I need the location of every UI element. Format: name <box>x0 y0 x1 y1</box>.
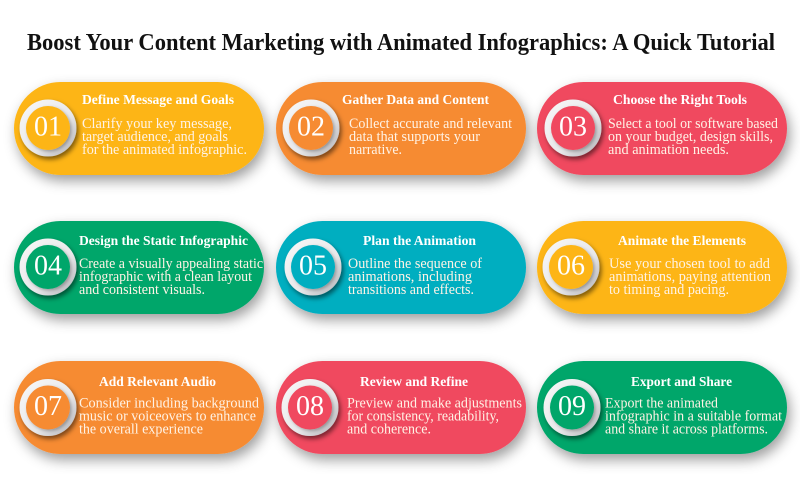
text 08: for consistency, readability, <box>347 408 499 424</box>
heading 01: Define Message and Goals <box>82 92 234 107</box>
text 01 <box>82 116 247 158</box>
text 02: data that supports your <box>349 129 480 145</box>
panel: step 08 <box>276 361 526 454</box>
badge 07 <box>20 379 76 436</box>
badge 05: 05 <box>299 250 327 282</box>
panel: step 04 <box>14 221 264 314</box>
panel: step 03 <box>537 82 787 175</box>
text 03: and animation needs. <box>608 142 729 158</box>
text 07: Consider including background <box>79 396 260 412</box>
text 08: Preview and make adjustments <box>347 396 522 412</box>
text 08: and coherence. <box>347 422 431 438</box>
panel: step 06 <box>537 221 787 314</box>
badge 04 <box>20 238 76 296</box>
badge 05 <box>284 238 342 296</box>
text 08 <box>347 396 522 438</box>
text 02 <box>349 116 512 158</box>
text 03: on your budget, design skills, <box>608 129 773 145</box>
heading 02: Gather Data and Content <box>342 92 489 107</box>
badge 06: 06 <box>557 250 585 282</box>
text 04 <box>79 256 263 298</box>
badge 07: 07 <box>34 391 62 422</box>
panel: step 07 <box>14 361 264 454</box>
heading 07: Add Relevant Audio <box>99 374 216 389</box>
text 06: Use your chosen tool to add <box>609 256 771 272</box>
text 05: animations, including <box>348 269 472 285</box>
text 01: target audience, and goals <box>82 129 228 145</box>
badge 08 <box>282 379 338 436</box>
heading 06: Animate the Elements <box>618 233 746 248</box>
text 04: and consistent visuals. <box>79 282 205 298</box>
text 05 <box>348 256 482 298</box>
text 03 <box>608 116 779 158</box>
text 05: Outline the sequence of <box>348 256 482 272</box>
badge 04: 04 <box>34 250 62 282</box>
badge 09: 09 <box>558 391 586 422</box>
text 09: Export the animated <box>605 396 719 412</box>
text 09: infographic in a suitable format <box>605 408 782 424</box>
badge 03 <box>544 100 602 156</box>
text 07: music or voiceovers to enhance <box>79 408 256 424</box>
text 09 <box>605 396 782 438</box>
heading 03: Choose the Right Tools <box>613 92 747 107</box>
text 07: the overall experience <box>79 422 203 438</box>
badge 06 <box>542 238 600 296</box>
heading 04: Design the Static Infographic <box>79 233 248 248</box>
text 06: animations, paying attention <box>609 269 772 285</box>
heading 08: Review and Refine <box>360 374 468 389</box>
text 02: Collect accurate and relevant <box>349 116 512 132</box>
badge 01: 01 <box>34 112 62 142</box>
text 03: Select a tool or software based <box>608 116 779 132</box>
badge 02 <box>282 100 340 156</box>
text 07 <box>79 396 260 438</box>
text 01: Clarify your key message, <box>82 116 232 132</box>
text 04: Create a visually appealing static <box>79 256 263 272</box>
title: Boost Your Content Marketing with Animated Infographics: A Quick Tutorial <box>27 30 775 56</box>
badge 03: 03 <box>559 112 587 142</box>
text 06 <box>609 256 772 298</box>
text 04: infographic with a clean layout <box>79 269 252 285</box>
text 05: transitions and effects. <box>348 282 474 298</box>
heading 05: Plan the Animation <box>363 233 476 248</box>
panel: step 05 <box>276 221 526 314</box>
badge 08: 08 <box>296 391 324 422</box>
badge 02: 02 <box>297 112 325 142</box>
panel: step 09 <box>537 361 787 454</box>
badge 09 <box>544 379 600 436</box>
panel: step 01 <box>14 82 264 175</box>
text 01: for the animated infographic. <box>82 142 247 158</box>
text 09: and share it across platforms. <box>605 422 768 438</box>
panel: step 02 <box>276 82 526 175</box>
heading 09: Export and Share <box>631 374 732 389</box>
badge 01 <box>20 100 76 156</box>
text 02: narrative. <box>349 142 402 158</box>
text 06: to timing and pacing. <box>609 282 729 298</box>
